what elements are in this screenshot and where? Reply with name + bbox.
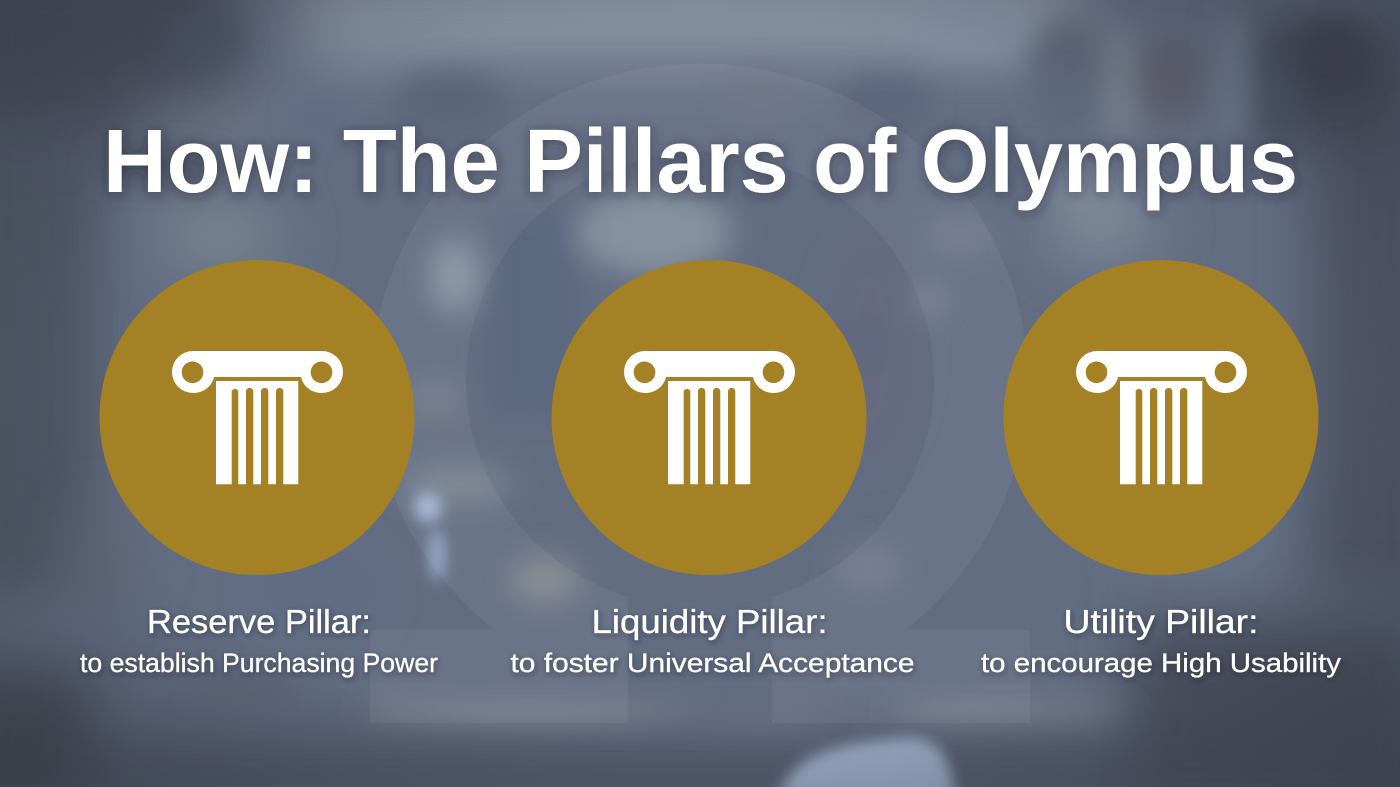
liquidity pillar label: to foster Universal Acceptance xyxy=(510,648,914,678)
utility pillar label: Utility Pillar: xyxy=(1064,603,1258,640)
panel: liquidity pillar xyxy=(510,260,914,678)
omega watermark xyxy=(370,64,1030,723)
icon: reserve pillar column xyxy=(100,260,414,575)
utility pillar label xyxy=(981,603,1342,678)
reserve pillar label: Reserve Pillar: xyxy=(147,603,371,640)
title: How: The Pillars of Olympus xyxy=(103,112,1298,212)
reserve pillar label: to establish Purchasing Power xyxy=(80,648,438,678)
panel: utility pillar xyxy=(981,260,1342,678)
icon: liquidity pillar column xyxy=(552,260,866,575)
utility pillar label: to encourage High Usability xyxy=(981,648,1342,678)
liquidity pillar label xyxy=(510,603,914,678)
liquidity pillar label: Liquidity Pillar: xyxy=(592,603,828,640)
panel: reserve pillar xyxy=(80,260,438,678)
icon: utility pillar column xyxy=(1004,260,1318,575)
reserve pillar label xyxy=(80,603,438,678)
